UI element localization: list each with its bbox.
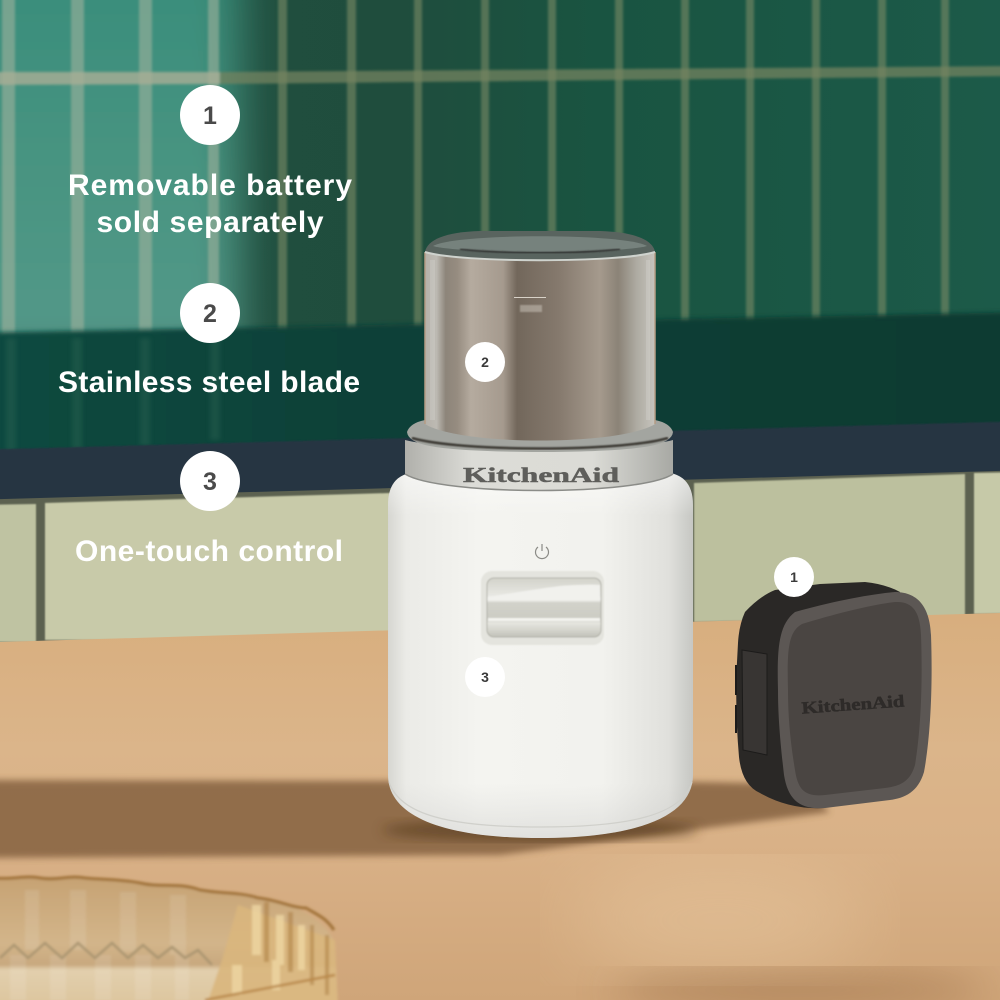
clear jar with steel cup: [425, 252, 655, 440]
feature 2: stainless steel blade: 2: [203, 300, 217, 328]
battery front face: [778, 592, 932, 808]
brand on collar: KitchenAid: [463, 463, 619, 487]
battery side door: [742, 650, 767, 755]
measure mark: [514, 297, 546, 312]
marker 1 on battery: [774, 557, 814, 597]
marker 3 on grinder: 3: [481, 669, 489, 685]
marker 1 on battery: 1: [790, 569, 798, 585]
battery pack: [735, 582, 932, 808]
glass dish foreground: [0, 876, 338, 1000]
feature 3: one-touch control: [75, 451, 343, 568]
feature 2: stainless steel blade: [58, 283, 360, 399]
grinder base body: [388, 472, 693, 838]
jar lid: [425, 231, 655, 260]
clear flange: [407, 420, 673, 452]
battery brand: KitchenAid: [801, 691, 906, 718]
marker 2 on grinder: [465, 342, 505, 382]
marker 2 on grinder: 2: [481, 354, 489, 370]
collar ring: [405, 440, 673, 490]
feature 3: one-touch control: 3: [203, 468, 217, 496]
slider switch: [481, 571, 604, 645]
power icon: [536, 544, 548, 559]
grinder shadow: [382, 819, 698, 841]
grinder: [382, 231, 698, 841]
feature 1: removable battery: Removable battery: [68, 169, 352, 202]
feature 1: removable battery: 1: [203, 102, 217, 130]
feature 1: removable battery: [68, 85, 352, 239]
feature 2: stainless steel blade: Stainless steel blade: [58, 366, 360, 399]
feature 3: one-touch control: One-touch control: [75, 535, 343, 568]
marker 3 on grinder: [465, 657, 505, 697]
feature 1: removable battery: sold separately: [96, 206, 324, 239]
battery side and top: [736, 582, 900, 808]
